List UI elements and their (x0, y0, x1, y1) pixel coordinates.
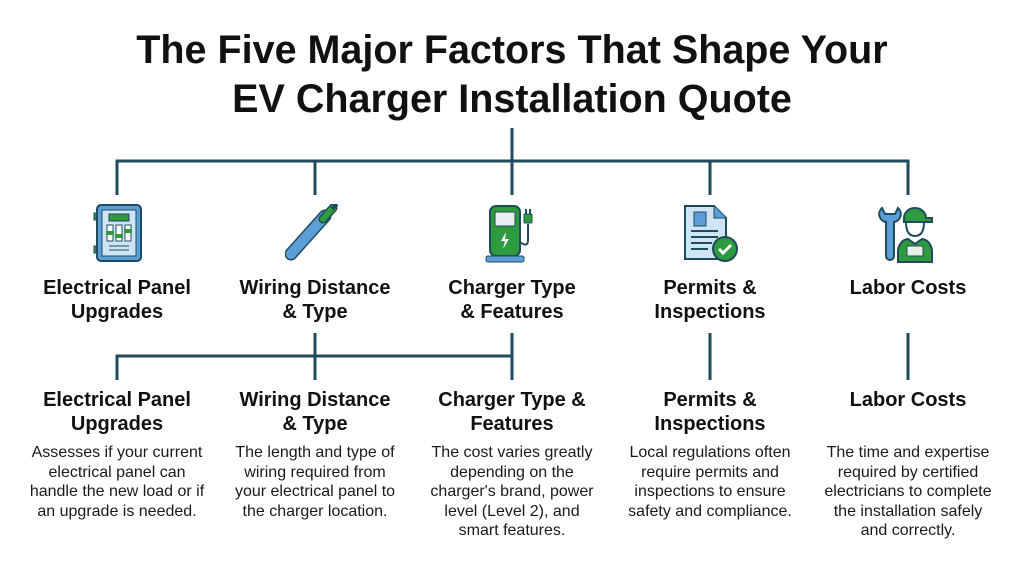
column: permits (628, 389, 792, 520)
title: The Five Major Factors That Shape Your (136, 28, 888, 72)
title (136, 28, 888, 121)
column: wiring: Wiring Distance (240, 389, 390, 411)
column: wiring: The length and type of (235, 444, 395, 461)
heading: labor: Labor Costs (850, 277, 966, 299)
icon: charger station (486, 205, 532, 262)
icon: wire (285, 204, 338, 260)
column: charger: The cost varies greatly (432, 444, 592, 461)
heading: wiring (240, 277, 390, 323)
column: charger: smart features. (459, 522, 565, 539)
headings row 1 (43, 277, 966, 323)
icon: permit document (684, 205, 738, 262)
icon: worker with wrench (878, 206, 933, 263)
heading: panel (43, 277, 191, 323)
column: permits: require permits and (641, 464, 779, 481)
heading: permits: Permits & (663, 277, 757, 299)
column: charger: level (Level 2), and (444, 503, 580, 520)
column: panel: electrical panel can (49, 464, 185, 481)
column: charger: charger's brand, power (430, 483, 594, 500)
title: EV Charger Installation Quote (232, 77, 792, 121)
heading: permits (654, 277, 766, 323)
column: charger: Features (470, 413, 554, 435)
column: permits: inspections to ensure (634, 483, 786, 500)
column: labor (824, 389, 992, 539)
column: labor: Labor Costs (850, 389, 966, 411)
column: permits: Permits & (663, 389, 757, 411)
heading: panel: Upgrades (71, 301, 163, 323)
column: charger (430, 389, 594, 539)
heading: charger: & Features (460, 301, 564, 323)
column: panel: Upgrades (71, 413, 163, 435)
column: charger: Charger Type & (438, 389, 586, 411)
heading: charger (448, 277, 576, 323)
column: wiring: your electrical panel to (235, 483, 395, 500)
column: panel: Assesses if your current (32, 444, 202, 461)
column: labor: the installation safely (834, 503, 982, 520)
column: labor: The time and expertise (827, 444, 989, 461)
column: permits: Local regulations often (630, 444, 790, 461)
column: panel: Electrical Panel (43, 389, 191, 411)
heading: permits: Inspections (654, 301, 766, 323)
heading: panel: Electrical Panel (43, 277, 191, 299)
column: permits: Inspections (654, 413, 766, 435)
column: panel: handle the new load or if (30, 483, 204, 500)
heading: wiring: & Type (282, 301, 348, 323)
column: panel (30, 389, 204, 520)
column: charger: depending on the (450, 464, 574, 481)
column: wiring: the charger location. (242, 503, 387, 520)
column: labor: and correctly. (861, 522, 955, 539)
column: wiring (235, 389, 395, 520)
heading: wiring: Wiring Distance (240, 277, 390, 299)
detail columns (30, 389, 992, 539)
icon: electrical panel (94, 204, 142, 262)
heading: charger: Charger Type (448, 277, 576, 299)
column: wiring: wiring required from (244, 464, 386, 481)
column: labor: electricians to complete (824, 483, 992, 500)
column: wiring: & Type (282, 413, 348, 435)
column: permits: safety and compliance. (628, 503, 792, 520)
column: panel: an upgrade is needed. (37, 503, 197, 520)
column: labor: required by certified (838, 464, 978, 481)
